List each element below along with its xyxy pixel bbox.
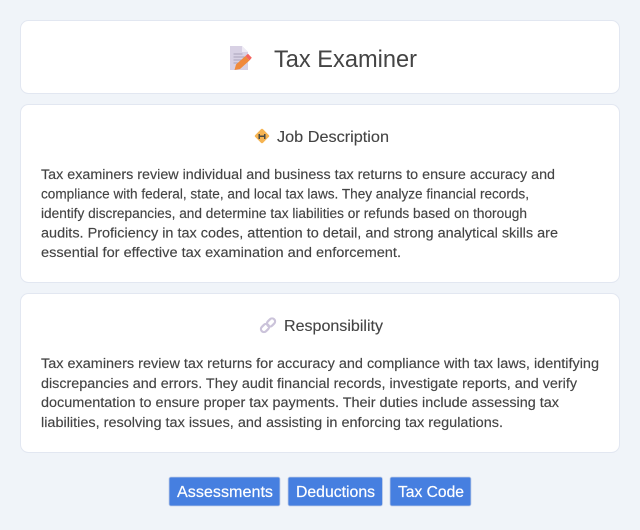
text block: job description: Tax examiners review individual and business tax returns to ensure accuracy and	[41, 167, 555, 183]
icon: diamond sign	[254, 128, 270, 144]
tag: deductions: Deductions	[296, 484, 375, 501]
tag: assessments: Assessments	[177, 484, 273, 501]
text block: responsibility: discrepancies and errors. They audit financial records, investigate reports, and verify	[41, 376, 578, 392]
text block: job description: identify discrepancies, and determine tax liabilities or refunds based on thorough	[41, 206, 527, 222]
text block: job description: essential for effective tax examination and enforcement.	[41, 245, 401, 261]
title: Tax Examiner	[274, 46, 417, 73]
text block: responsibility: documentation to ensure proper tax payments. Their duties include assessing tax	[41, 395, 559, 411]
text block: job description	[41, 167, 558, 261]
tag: tax code: Tax Code	[398, 484, 464, 501]
header panel	[20, 20, 620, 94]
text block: responsibility: liabilities, resolving tax issues, and assisting in enforcing tax regulations.	[41, 415, 503, 431]
text block: responsibility	[41, 356, 599, 431]
text block: job description: compliance with federal, state, and local tax laws. They analyze financial records,	[41, 186, 529, 202]
icon: document with pencil	[230, 46, 252, 70]
tag: deductions	[288, 477, 382, 506]
text block: job description: audits. Proficiency in tax codes, attention to detail, and strong analytical skills are	[41, 226, 558, 242]
heading: job description: Job Description	[277, 129, 389, 146]
panel: responsibility	[20, 294, 620, 452]
heading: responsibility: Responsibility	[284, 318, 383, 335]
tag: assessments	[169, 477, 280, 506]
tag: tax code	[390, 477, 471, 506]
panel: job description	[20, 104, 620, 282]
icon: chain link	[260, 317, 276, 333]
text block: responsibility: Tax examiners review tax returns for accuracy and compliance with tax laws, identifying	[41, 356, 599, 372]
